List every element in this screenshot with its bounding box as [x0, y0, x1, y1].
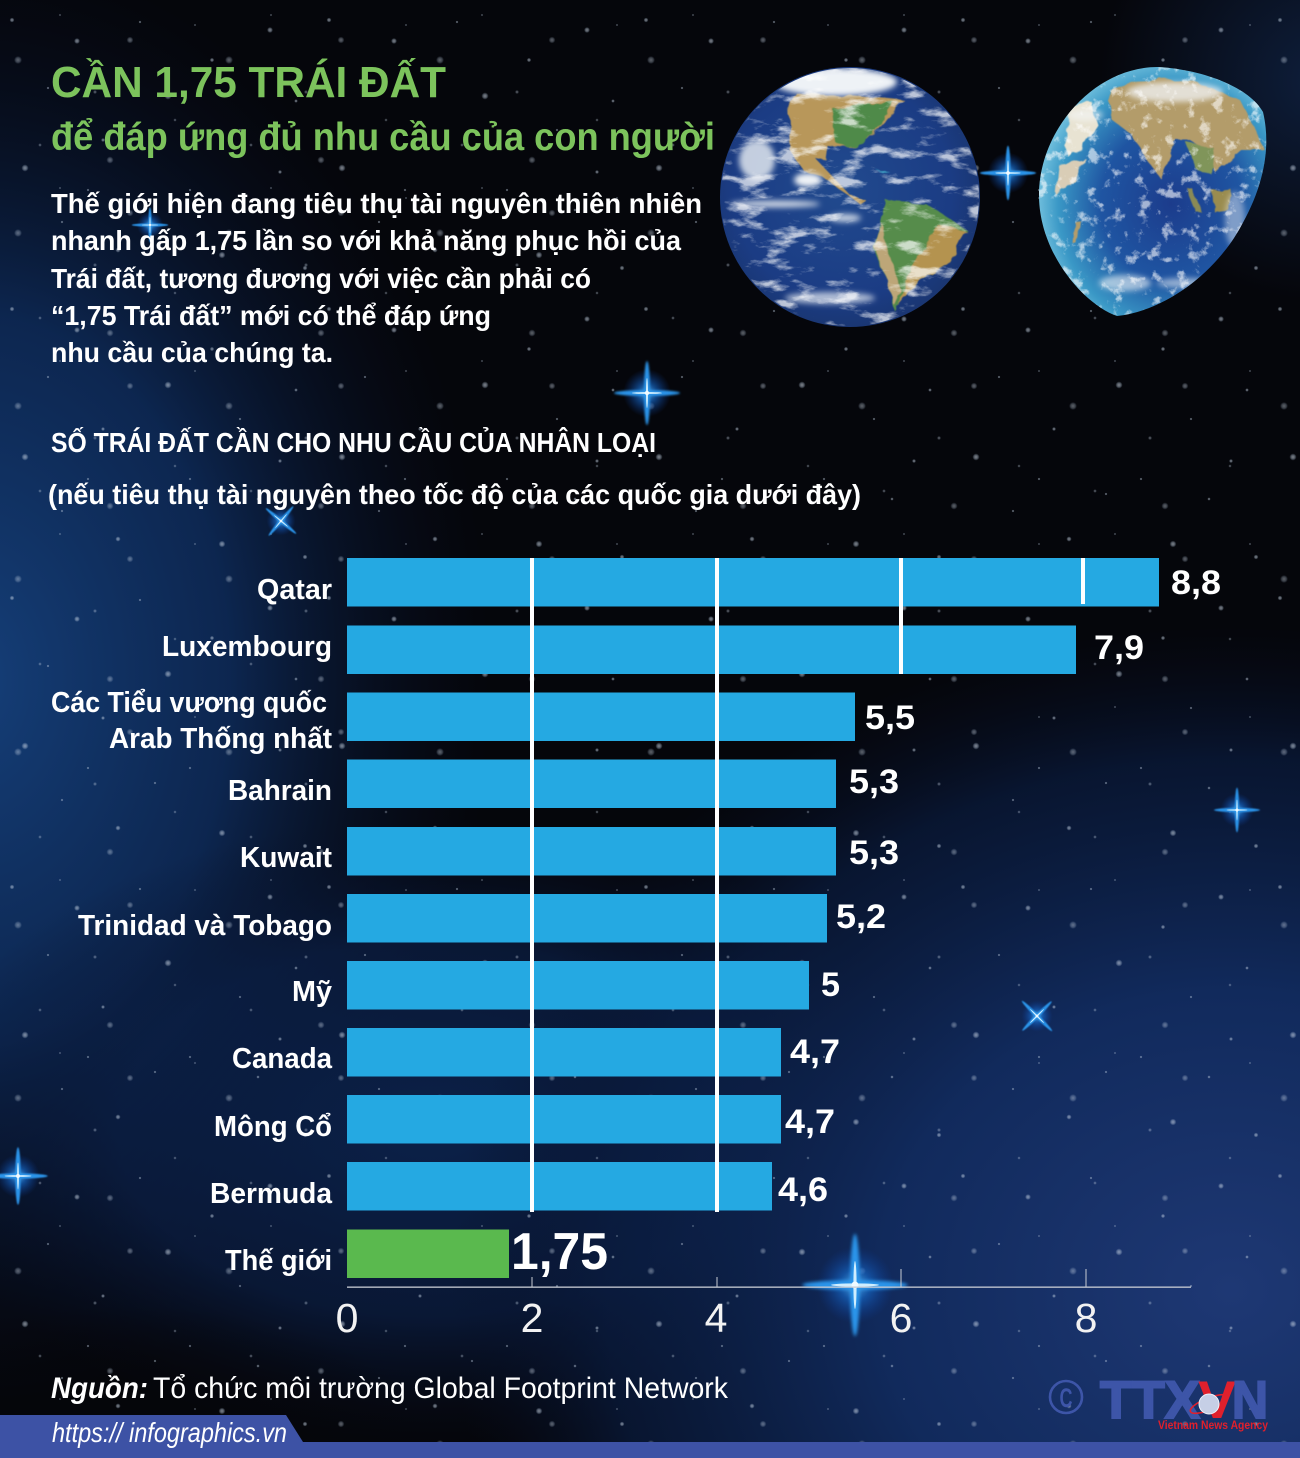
country labels: Canada — [232, 1043, 333, 1075]
value labels: 5,5 — [865, 699, 915, 737]
x axis: 4 — [705, 1295, 727, 1341]
x axis: 8 — [1075, 1295, 1097, 1341]
illustration: two Earths — [720, 67, 1270, 328]
logo: TTXVN: Vietnam News Agency — [1158, 1418, 1268, 1432]
value labels: 5 — [821, 966, 840, 1004]
x axis — [336, 1269, 1191, 1341]
value labels: 4,7 — [785, 1103, 835, 1141]
intro text block: Trái đất, tương đương với việc cần phải có — [51, 263, 591, 294]
country labels: Arab Thống nhất — [109, 723, 332, 755]
intro text block — [51, 188, 702, 368]
source line: Nguồn: — [51, 1372, 148, 1405]
icon: full Earth (Americas) — [720, 67, 980, 328]
country labels: Qatar — [257, 574, 332, 606]
logo: TTXVN: C — [1060, 1383, 1072, 1413]
source line: Tổ chức môi trường Global Footprint Network — [153, 1372, 729, 1405]
country labels: Luxembourg — [162, 631, 332, 663]
bar chart — [51, 558, 1221, 1341]
chart heading: (nếu tiêu thụ tài nguyên theo tốc độ của các quốc gia dưới đây) — [48, 479, 861, 510]
chart heading — [48, 426, 861, 510]
title: để đáp ứng đủ nhu cầu của con người — [51, 116, 715, 159]
value labels: 7,9 — [1094, 629, 1144, 667]
country labels: Mỹ — [292, 976, 332, 1008]
icon: partial Earth (Asia) — [1038, 67, 1270, 318]
logo: TTXVN: V — [1198, 1371, 1236, 1430]
value labels: 4,7 — [790, 1033, 840, 1071]
country labels: Bahrain — [228, 775, 332, 807]
value labels: 8,8 — [1171, 564, 1221, 602]
intro text block: “1,75 Trái đất” mới có thể đáp ứng — [51, 300, 491, 331]
intro text block: nhanh gấp 1,75 lần so với khả năng phục hồi của — [51, 225, 681, 256]
value labels: 5,2 — [836, 898, 886, 936]
country labels: Mông Cổ — [214, 1111, 332, 1143]
country labels: Thế giới — [225, 1245, 332, 1277]
footer band — [0, 1415, 1300, 1458]
country labels: Các Tiểu vương quốc — [51, 687, 327, 719]
grid lines — [530, 558, 1085, 1212]
chart heading: SỐ TRÁI ĐẤT CẦN CHO NHU CẦU CỦA NHÂN LOẠI — [51, 426, 656, 458]
country labels: Kuwait — [240, 842, 332, 874]
bars — [347, 558, 1159, 1278]
footer band: https:// infographics.vn — [52, 1417, 287, 1448]
logo: TTXVN — [1050, 1371, 1268, 1432]
x axis: 2 — [521, 1295, 543, 1341]
logo: TTXVN: TTX — [1100, 1371, 1200, 1430]
x axis: 6 — [890, 1295, 912, 1341]
value labels: 4,6 — [778, 1171, 828, 1209]
title: CẦN 1,75 TRÁI ĐẤT — [51, 57, 446, 107]
logo: TTXVN: N — [1232, 1371, 1268, 1430]
value labels: 1,75 — [511, 1223, 608, 1281]
intro text block: Thế giới hiện đang tiêu thụ tài nguyên thiên nhiên — [51, 188, 702, 219]
country labels: Bermuda — [210, 1178, 333, 1210]
country labels — [51, 574, 333, 1277]
country labels: Trinidad và Tobago — [78, 910, 332, 942]
x axis: 0 — [336, 1295, 358, 1341]
value labels: 5,3 — [849, 834, 899, 872]
intro text block: nhu cầu của chúng ta. — [51, 337, 333, 368]
value labels — [511, 564, 1221, 1281]
title — [51, 57, 715, 159]
value labels: 5,3 — [849, 763, 899, 801]
